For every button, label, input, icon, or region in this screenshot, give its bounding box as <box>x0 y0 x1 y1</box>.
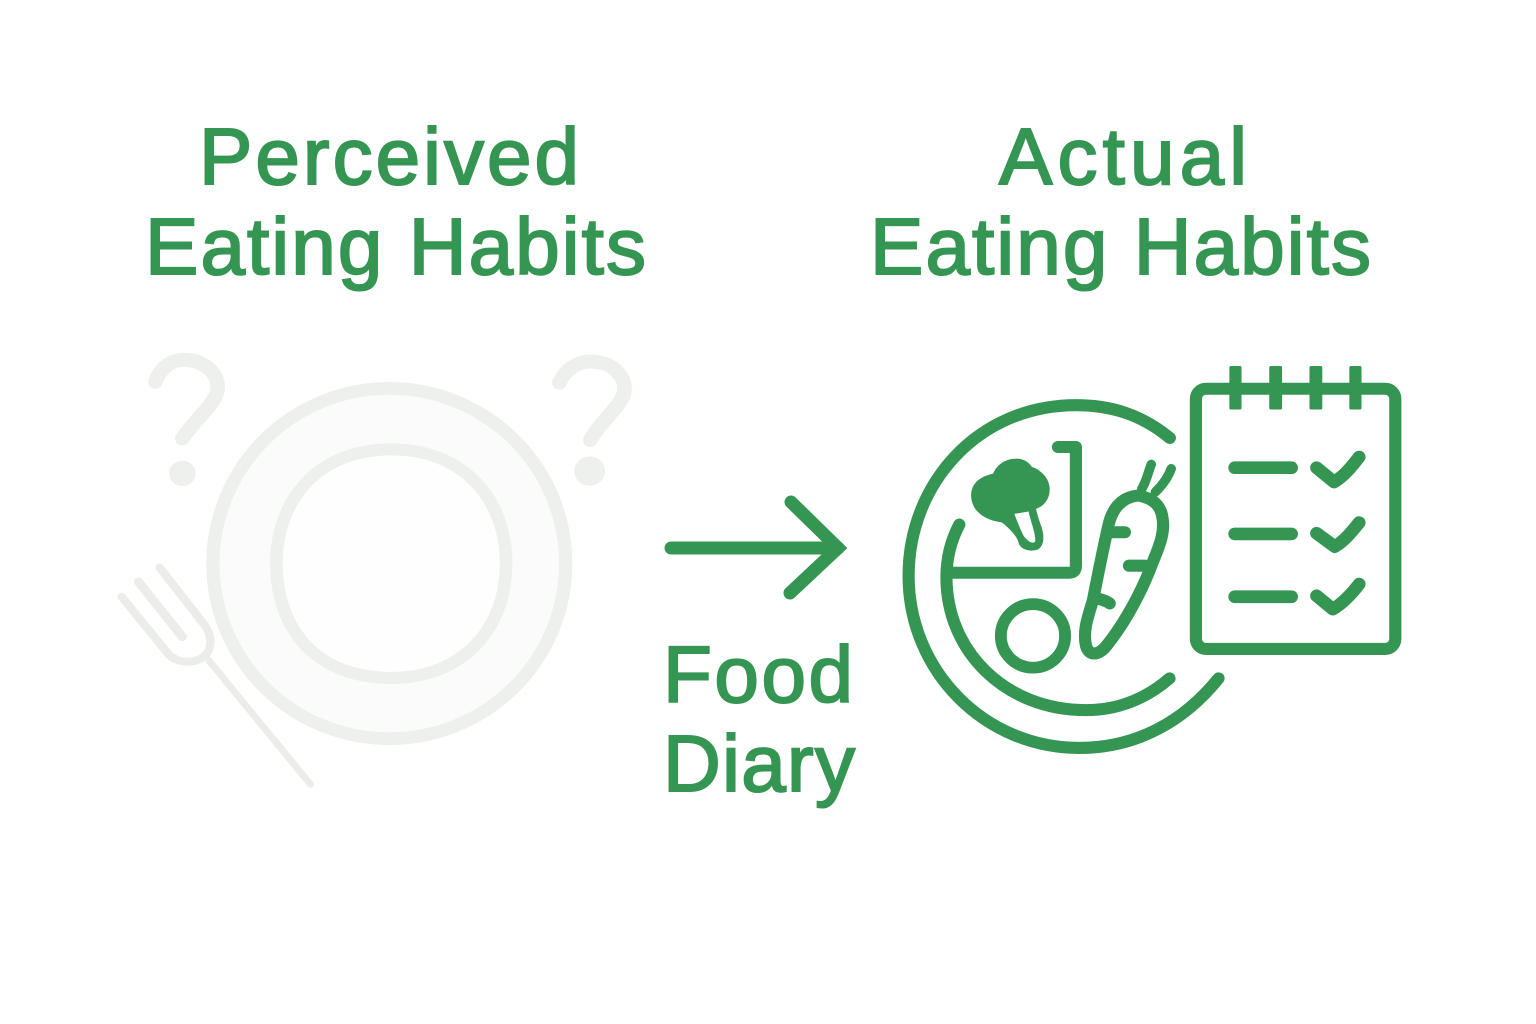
fork <box>122 568 310 784</box>
icon: empty plate with fork and question marks <box>122 360 624 784</box>
plate inner arc with dividers <box>946 447 1170 710</box>
heading: actual eating habits <box>870 112 1371 291</box>
plate outer arc <box>909 405 1219 748</box>
label: food diary <box>663 630 855 808</box>
checklist row 2 <box>1235 523 1359 547</box>
question mark left <box>155 360 218 486</box>
label: food diary: Diary <box>663 719 855 808</box>
heading: perceived eating habits <box>145 112 646 291</box>
plate <box>213 388 566 739</box>
checklist row 1 <box>1235 457 1359 482</box>
heading: perceived eating habits: Eating Habits <box>145 202 646 291</box>
checklist row 3 <box>1235 584 1359 609</box>
carrot <box>1085 464 1171 654</box>
icon: plate with vegetables and checklist <box>909 366 1395 748</box>
broccoli <box>971 459 1050 551</box>
heading: perceived eating habits: Perceived <box>199 112 579 201</box>
notepad <box>1196 366 1395 649</box>
round food <box>1001 604 1065 668</box>
question mark right <box>559 361 624 486</box>
heading: actual eating habits: Actual <box>999 112 1247 201</box>
label: food diary: Food <box>663 630 853 719</box>
arrow <box>671 502 838 593</box>
heading: actual eating habits: Eating Habits <box>870 202 1371 291</box>
